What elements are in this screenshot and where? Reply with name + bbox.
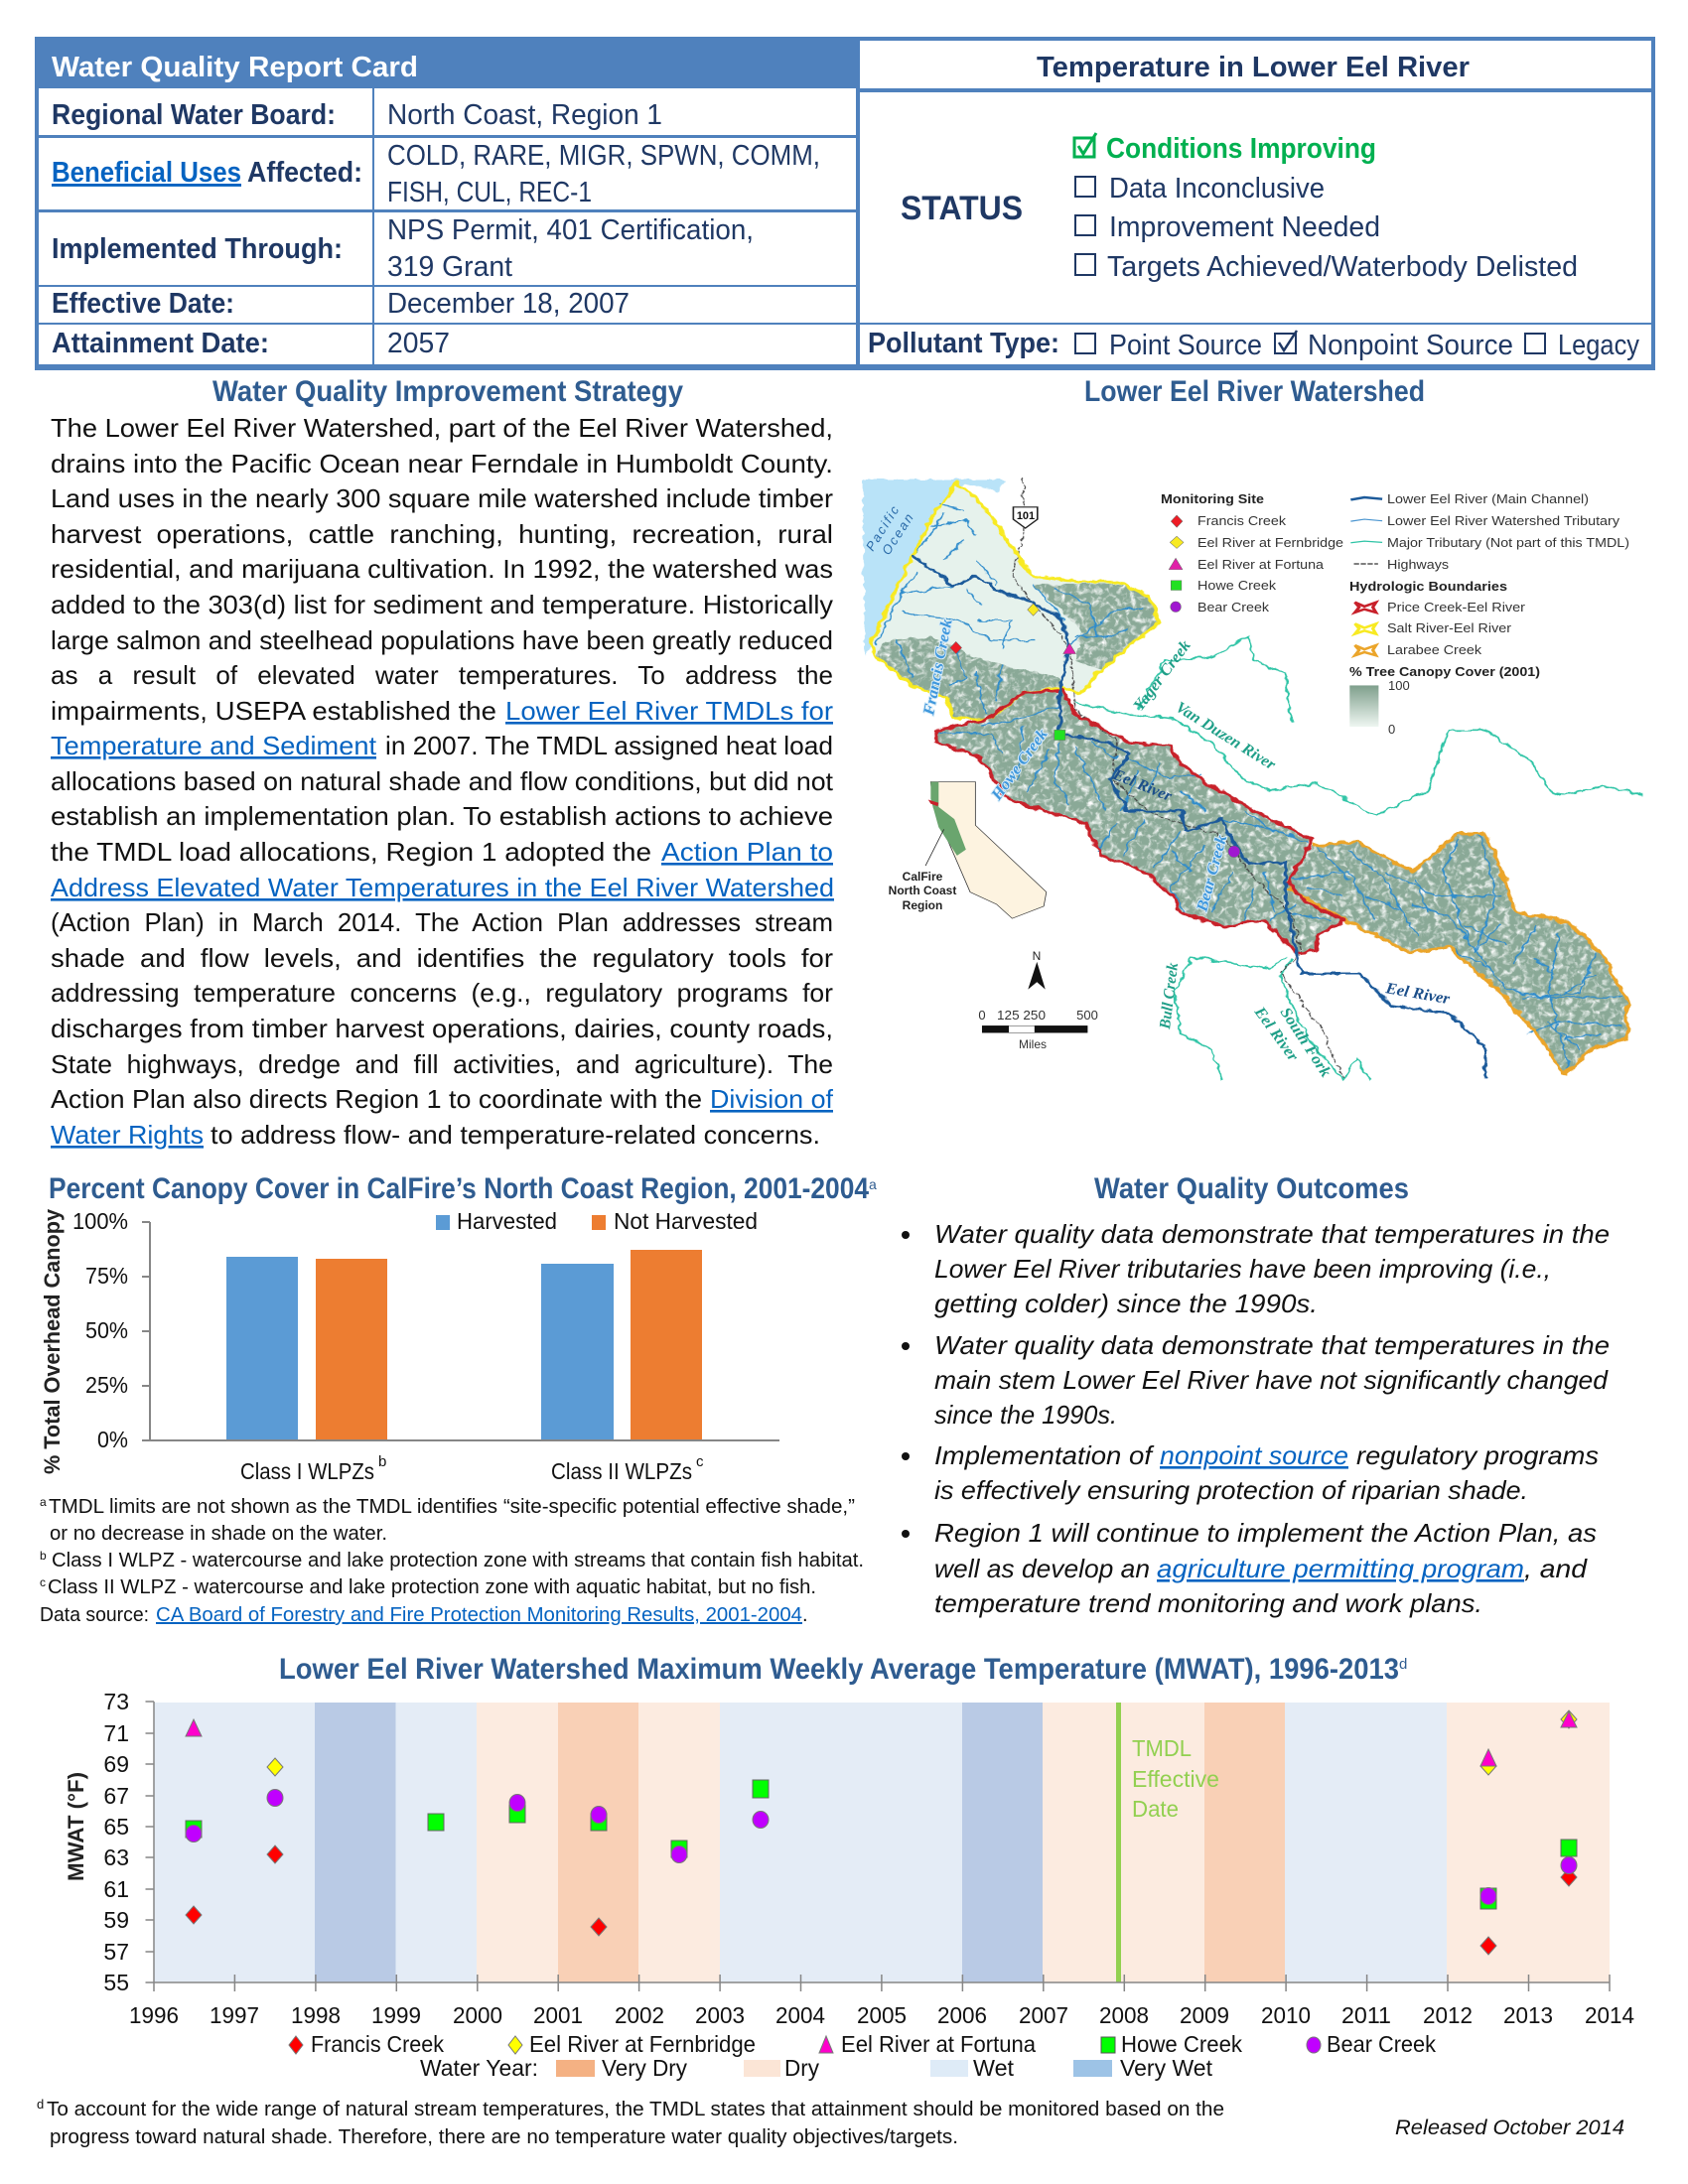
row: beneficial uses: Affected:	[247, 157, 362, 189]
canopy chart footnotes: b	[40, 1549, 47, 1563]
outcome bullet 2: main stem Lower Eel River have not significantly changed	[934, 1365, 1610, 1395]
map water labels: Bear Creek	[1194, 833, 1230, 914]
MWAT y labels: 69	[103, 1751, 129, 1777]
strategy paragraph: Water Rights	[51, 1120, 204, 1150]
heading: water quality outcomes: Water Quality Outcomes	[1094, 1172, 1409, 1205]
class labels: c	[696, 1453, 704, 1470]
class I bars	[226, 1257, 387, 1439]
canopy axes	[142, 1222, 779, 1441]
water year legend: Dry	[784, 2055, 819, 2081]
row: effective date	[52, 288, 630, 320]
pollutant type row: Pollutant Type:	[868, 328, 1059, 359]
outcome bullet 3: regulatory programs	[1356, 1440, 1599, 1470]
map inset and scale labels: N	[1033, 949, 1041, 963]
map legend text: 100	[1388, 678, 1410, 693]
strategy paragraph: drains into the Pacific Ocean near Ferndale in Humboldt County.	[51, 449, 833, 478]
map legend text: Larabee Creek	[1387, 642, 1482, 657]
class labels: Class I WLPZs	[240, 1458, 374, 1484]
map legend text	[1161, 491, 1629, 737]
map inset and scale labels: CalFire	[903, 870, 943, 884]
water year legend: Very Wet	[1120, 2055, 1213, 2081]
MWAT x labels: 1996	[129, 2002, 179, 2028]
california inset	[925, 782, 1047, 918]
major tributaries	[1075, 636, 1643, 1080]
MWAT x labels: 1997	[210, 2002, 259, 2028]
strategy paragraph: Action Plan to	[661, 837, 833, 867]
canopy chart footnotes: .	[802, 1604, 808, 1626]
outcome bullet 1: Water quality data demonstrate that temperatures in the	[934, 1219, 1610, 1249]
MWAT scatter chart	[64, 1689, 1634, 2081]
canopy y axis title: % Total Overhead Canopy	[40, 1208, 65, 1474]
scale bar	[982, 1025, 1087, 1032]
strategy paragraph: discharges from timber harvest operations, dairies, county roads,	[51, 1014, 833, 1043]
canopy chart footnotes: Class II WLPZ - watercourse and lake protection zone with aquatic habitat, but no fish.	[48, 1576, 816, 1598]
status checklist: Improvement Needed	[1109, 211, 1380, 243]
canopy chart footnotes: c	[40, 1575, 46, 1589]
strategy paragraph: Address Elevated Water Temperatures in the Eel River Watershed	[51, 873, 834, 902]
row: attainment date: 2057	[387, 328, 450, 359]
heading: MWAT chart: Lower Eel River Watershed Maximum Weekly Average Temperature (MWAT), 1996-2013	[279, 1653, 1399, 1686]
class labels: b	[378, 1453, 386, 1470]
heading: water quality improvement strategy: Water Quality Improvement Strategy	[212, 375, 683, 408]
site legend	[289, 2031, 1436, 2057]
outcome bullet 4: agriculture permitting program	[1157, 1554, 1524, 1583]
strategy paragraph: shade and flow levels, and identifies the regulatory tools for	[51, 943, 833, 973]
row: implemented through: NPS Permit, 401 Certification,	[387, 214, 754, 246]
salt river region	[870, 482, 1160, 720]
outcome bullet 3: nonpoint source	[1160, 1440, 1348, 1470]
map legend text: Price Creek-Eel River	[1387, 600, 1526, 614]
strategy paragraph: in 2007. The TMDL assigned heat load	[385, 731, 833, 760]
strategy paragraph: harvest operations, cattle ranching, hunting, recreation, rural	[51, 519, 833, 549]
MWAT x labels: 2005	[857, 2002, 907, 2028]
strategy paragraph: Land uses in the nearly 300 square mile watershed include timber	[51, 483, 833, 513]
pollutant type row	[868, 328, 1639, 361]
canopy y axis labels: 100%	[72, 1208, 128, 1234]
outcome bullet 2	[902, 1330, 1610, 1430]
map legend text: Francis Creek	[1197, 513, 1287, 528]
report card title: Water Quality Report Card	[52, 52, 418, 83]
row: regional water board: North Coast, Region 1	[387, 99, 662, 131]
report topic title: Temperature in Lower Eel River	[1037, 52, 1470, 83]
strategy paragraph: allocations based on natural shade and flow conditions, but did not	[51, 766, 834, 796]
map legend text: Hydrologic Boundaries	[1349, 579, 1507, 594]
row: attainment date	[52, 328, 450, 359]
map legend text: Major Tributary (Not part of this TMDL)	[1387, 535, 1629, 550]
outcome bullet 2: Water quality data demonstrate that temperatures in the	[934, 1330, 1610, 1360]
canopy chart footnotes	[40, 1495, 864, 1626]
map inset and scale labels	[889, 510, 1098, 1051]
data series: Howe Creek	[186, 1780, 1577, 1909]
MWAT y labels: 57	[103, 1939, 129, 1965]
data series: Eel River at Fortuna	[186, 1711, 1577, 1766]
outcome bullet 3: is effectively ensuring protection of riparian shade.	[934, 1475, 1528, 1505]
class labels	[240, 1453, 704, 1484]
price creek region	[936, 690, 1343, 953]
heading: lower eel river watershed: Lower Eel River Watershed	[1084, 375, 1425, 408]
strategy paragraph: State highways, dredge and fill activities, and agriculture). The	[51, 1049, 833, 1079]
site markers	[950, 515, 1240, 858]
MWAT x labels: 2009	[1180, 2002, 1229, 2028]
site legend: Eel River at Fernbridge	[529, 2031, 756, 2057]
watershed boundaries	[870, 482, 1160, 720]
canopy chart footnotes: Class I WLPZ - watercourse and lake protection zone with streams that contain fish habitat.	[52, 1550, 864, 1571]
map water labels: Pacific	[863, 501, 903, 554]
MWAT footnote: progress toward natural shade. Therefore, there are no temperature water quality objectives/targets.	[50, 2126, 958, 2148]
map inset and scale labels: Miles	[1019, 1037, 1047, 1051]
status checklist: Conditions Improving	[1106, 133, 1376, 165]
status checklist: Targets Achieved/Waterbody Delisted	[1107, 251, 1578, 283]
strategy paragraph: the TMDL load allocations, Region 1 adopted the	[51, 837, 651, 867]
map legend text: Howe Creek	[1197, 578, 1277, 593]
map legend text: Salt River-Eel River	[1387, 620, 1512, 635]
map legend text: Lower Eel River Watershed Tributary	[1387, 513, 1620, 528]
strategy paragraph	[51, 413, 834, 1150]
highways	[1012, 479, 1343, 1078]
strategy paragraph: large salmon and steelhead populations have been greatly reduced	[51, 625, 833, 655]
heading: percent canopy cover: Percent Canopy Cover in CalFire’s North Coast Region, 2001-2004	[49, 1172, 869, 1205]
MWAT footnote: d	[37, 2097, 44, 2112]
site legend: Eel River at Fortuna	[841, 2031, 1036, 2057]
site legend: Howe Creek	[1121, 2031, 1242, 2057]
TMDL effective date line	[1116, 1703, 1121, 1982]
larabee creek region	[1288, 833, 1627, 1074]
strategy paragraph: Lower Eel River TMDLs for	[505, 696, 833, 726]
MWAT x labels: 2007	[1019, 2002, 1068, 2028]
heading: percent canopy cover: a	[869, 1176, 877, 1192]
map water labels: Eel River	[1383, 980, 1452, 1008]
MWAT x labels: 1999	[371, 2002, 421, 2028]
data series: Bear Creek	[186, 1789, 1577, 1904]
map inset and scale labels: 101	[1017, 510, 1035, 522]
MWAT x labels: 2006	[937, 2002, 987, 2028]
outcome bullet 4: , and	[1524, 1554, 1589, 1583]
class II bars	[541, 1250, 702, 1439]
map water labels: Eel River	[1110, 766, 1175, 805]
row: beneficial uses	[52, 140, 820, 208]
MWAT y labels: 73	[103, 1689, 129, 1714]
canopy y axis labels: 25%	[85, 1372, 128, 1398]
canopy chart footnotes: TMDL limits are not shown as the TMDL identifies “site-specific potential effective shade,”	[49, 1496, 855, 1518]
strategy paragraph: addressing temperature concerns (e.g., regulatory programs for	[51, 978, 833, 1008]
status checklist: Data Inconclusive	[1109, 173, 1325, 205]
report card table	[35, 37, 1655, 369]
MWAT x labels: 2004	[775, 2002, 825, 2028]
MWAT x labels: 2000	[453, 2002, 502, 2028]
MWAT footnote	[37, 2097, 1224, 2148]
outcome bullet 4: well as develop an	[934, 1554, 1150, 1583]
map inset and scale labels: 0	[978, 1008, 986, 1023]
row: regional water board: Regional Water Board:	[52, 99, 336, 131]
row: beneficial uses: Beneficial Uses	[52, 157, 241, 189]
row: implemented through	[52, 214, 754, 283]
canopy chart footnotes: a	[40, 1495, 47, 1509]
MWAT y axis title: MWAT (°F)	[64, 1772, 88, 1881]
water year legend	[420, 2055, 1213, 2081]
MWAT x labels: 2011	[1341, 2002, 1391, 2028]
map water labels	[863, 501, 1452, 1080]
MWAT y labels: 59	[103, 1907, 129, 1933]
map legend text: Lower Eel River (Main Channel)	[1387, 491, 1589, 506]
canopy y axis labels: 75%	[85, 1263, 128, 1289]
map water labels: Yager Creek	[1131, 637, 1195, 714]
watershed map	[863, 479, 1643, 1080]
canopy gradient key	[1349, 685, 1378, 727]
map water labels: Ocean	[879, 509, 917, 558]
canopy y axis labels: 0%	[97, 1427, 128, 1452]
map legend text: % Tree Canopy Cover (2001)	[1349, 664, 1540, 679]
map legend text: Eel River at Fernbridge	[1197, 535, 1343, 550]
strategy paragraph: establish an implementation plan. To establish actions to achieve	[51, 801, 833, 831]
MWAT footnote: To account for the wide range of natural stream temperatures, the TMDL states that attainment should be monitored based on the	[47, 2099, 1224, 2120]
MWAT y labels: 71	[103, 1720, 129, 1746]
row: regional water board	[52, 99, 662, 131]
map water labels: Van Duzen River	[1173, 699, 1279, 774]
canopy chart footnotes: or no decrease in shade on the water.	[50, 1523, 387, 1545]
MWAT y labels: 55	[103, 1970, 129, 1995]
map geometry	[863, 479, 1643, 1080]
canopy chart footnotes: Data source:	[40, 1604, 149, 1626]
row: implemented through: Implemented Through:	[52, 233, 343, 265]
canopy bar chart	[40, 1208, 779, 1484]
release date: Released October 2014	[1395, 2116, 1624, 2139]
MWAT x labels: 2003	[695, 2002, 745, 2028]
canopy legend	[436, 1208, 758, 1234]
MWAT x labels: 2012	[1423, 2002, 1473, 2028]
row: effective date: December 18, 2007	[387, 288, 630, 320]
strategy paragraph: Temperature and Sediment	[51, 731, 377, 760]
outcomes bullet list	[902, 1219, 1610, 1618]
strategy paragraph: Action Plan also directs Region 1 to coordinate with the	[51, 1084, 702, 1114]
map legend text: Eel River at Fortuna	[1197, 557, 1325, 572]
map legend text: 0	[1388, 722, 1395, 737]
TMDL effective date label: Date	[1132, 1796, 1179, 1822]
MWAT x labels: 1998	[291, 2002, 341, 2028]
outcome bullet 2: since the 1990s.	[934, 1400, 1117, 1430]
canopy legend: Not Harvested	[614, 1208, 758, 1234]
status label: STATUS	[901, 190, 1023, 227]
map water labels: South Fork	[1277, 1005, 1334, 1080]
water year legend: Water Year:	[420, 2055, 538, 2081]
row: attainment date: Attainment Date:	[52, 328, 269, 359]
strategy paragraph: residential, and marijuana cultivation. In 1992, the watershed was	[51, 554, 833, 584]
north arrow	[1028, 962, 1046, 990]
map legend text: Bear Creek	[1197, 600, 1270, 614]
site legend: Bear Creek	[1327, 2031, 1436, 2057]
map inset and scale labels: 125 250	[997, 1008, 1046, 1023]
strategy paragraph: Division of	[710, 1084, 834, 1114]
pollutant type row: Point Source	[1109, 330, 1262, 361]
heading: MWAT chart: d	[1399, 1656, 1407, 1673]
row: implemented through: 319 Grant	[387, 251, 512, 283]
strategy paragraph: The Lower Eel River Watershed, part of the Eel River Watershed,	[51, 413, 833, 443]
MWAT x labels: 2014	[1585, 2002, 1634, 2028]
map water labels: Bull Creek	[1157, 962, 1182, 1030]
outcome bullet 1	[902, 1219, 1610, 1318]
TMDL effective date label	[1132, 1735, 1219, 1822]
map inset and scale labels: North Coast	[889, 884, 956, 897]
outcome bullet 4	[902, 1518, 1597, 1618]
map inset and scale labels: 500	[1076, 1008, 1098, 1023]
strategy paragraph: to address flow- and temperature-related concerns.	[211, 1120, 820, 1150]
data series: Francis Creek	[186, 1845, 1577, 1955]
outcome bullet 1: Lower Eel River tributaries have been improving (i.e.,	[934, 1254, 1551, 1284]
water year legend: Very Dry	[602, 2055, 687, 2081]
TMDL effective date label: TMDL	[1132, 1735, 1192, 1761]
map legend text: Highways	[1387, 557, 1450, 572]
row: beneficial uses: COLD, RARE, MIGR, SPWN, COMM,	[387, 140, 820, 172]
outcome bullet 3: Implementation of	[934, 1440, 1155, 1470]
water year bands	[154, 1703, 1610, 1982]
main channel	[913, 556, 1485, 1078]
row: effective date: Effective Date:	[52, 288, 234, 320]
MWAT y labels: 61	[103, 1876, 129, 1902]
MWAT x labels: 2008	[1099, 2002, 1149, 2028]
map water labels: Howe Creek	[988, 726, 1052, 804]
TMDL effective date label: Effective	[1132, 1766, 1219, 1792]
MWAT x labels: 2013	[1503, 2002, 1553, 2028]
MWAT y labels: 65	[103, 1814, 129, 1840]
status checklist	[1074, 133, 1578, 283]
class labels: Class II WLPZs	[551, 1458, 692, 1484]
MWAT x labels	[129, 2002, 1634, 2028]
pollutant type row: Nonpoint Source	[1308, 330, 1513, 361]
pollutant type row: Legacy	[1558, 330, 1639, 361]
site legend: Francis Creek	[311, 2031, 444, 2057]
strategy paragraph: added to the 303(d) list for sediment and temperature. Historically	[51, 590, 833, 619]
map inset and scale labels: Region	[903, 898, 942, 912]
map legend text: Monitoring Site	[1161, 491, 1264, 506]
map legend line keys	[1350, 497, 1382, 655]
data series: Eel River at Fernbridge	[267, 1710, 1577, 1776]
outcome bullet 4: temperature trend monitoring and work plans.	[934, 1588, 1482, 1618]
MWAT y labels: 63	[103, 1844, 129, 1870]
strategy paragraph: impairments, USEPA established the	[51, 696, 496, 726]
MWAT x labels: 2001	[533, 2002, 583, 2028]
MWAT y labels: 67	[103, 1783, 129, 1809]
map water labels: Francis Creek	[920, 617, 956, 718]
MWAT axes	[145, 1702, 1610, 1991]
canopy chart footnotes: CA Board of Forestry and Fire Protection Monitoring Results, 2001-2004	[156, 1604, 802, 1626]
row: beneficial uses: FISH, CUL, REC-1	[387, 177, 592, 208]
MWAT x labels: 2002	[615, 2002, 664, 2028]
MWAT x labels: 2010	[1261, 2002, 1311, 2028]
outcome bullet 1: getting colder) since the 1990s.	[934, 1289, 1318, 1318]
water year legend: Wet	[973, 2055, 1015, 2081]
map water labels: Eel River	[1250, 1004, 1302, 1065]
canopy y axis labels	[72, 1208, 128, 1452]
outcome bullet 4: Region 1 will continue to implement the Action Plan, as	[934, 1518, 1597, 1548]
canopy legend: Harvested	[457, 1208, 557, 1234]
MWAT y labels	[103, 1689, 129, 1995]
canopy y axis labels: 50%	[85, 1317, 128, 1343]
highway 101 shield	[1013, 507, 1038, 528]
outcome bullet 3	[902, 1440, 1599, 1505]
strategy paragraph: as a result of elevated water temperatures. To address the	[51, 660, 833, 690]
strategy paragraph: (Action Plan) in March 2014. The Action Plan addresses stream	[51, 907, 833, 937]
